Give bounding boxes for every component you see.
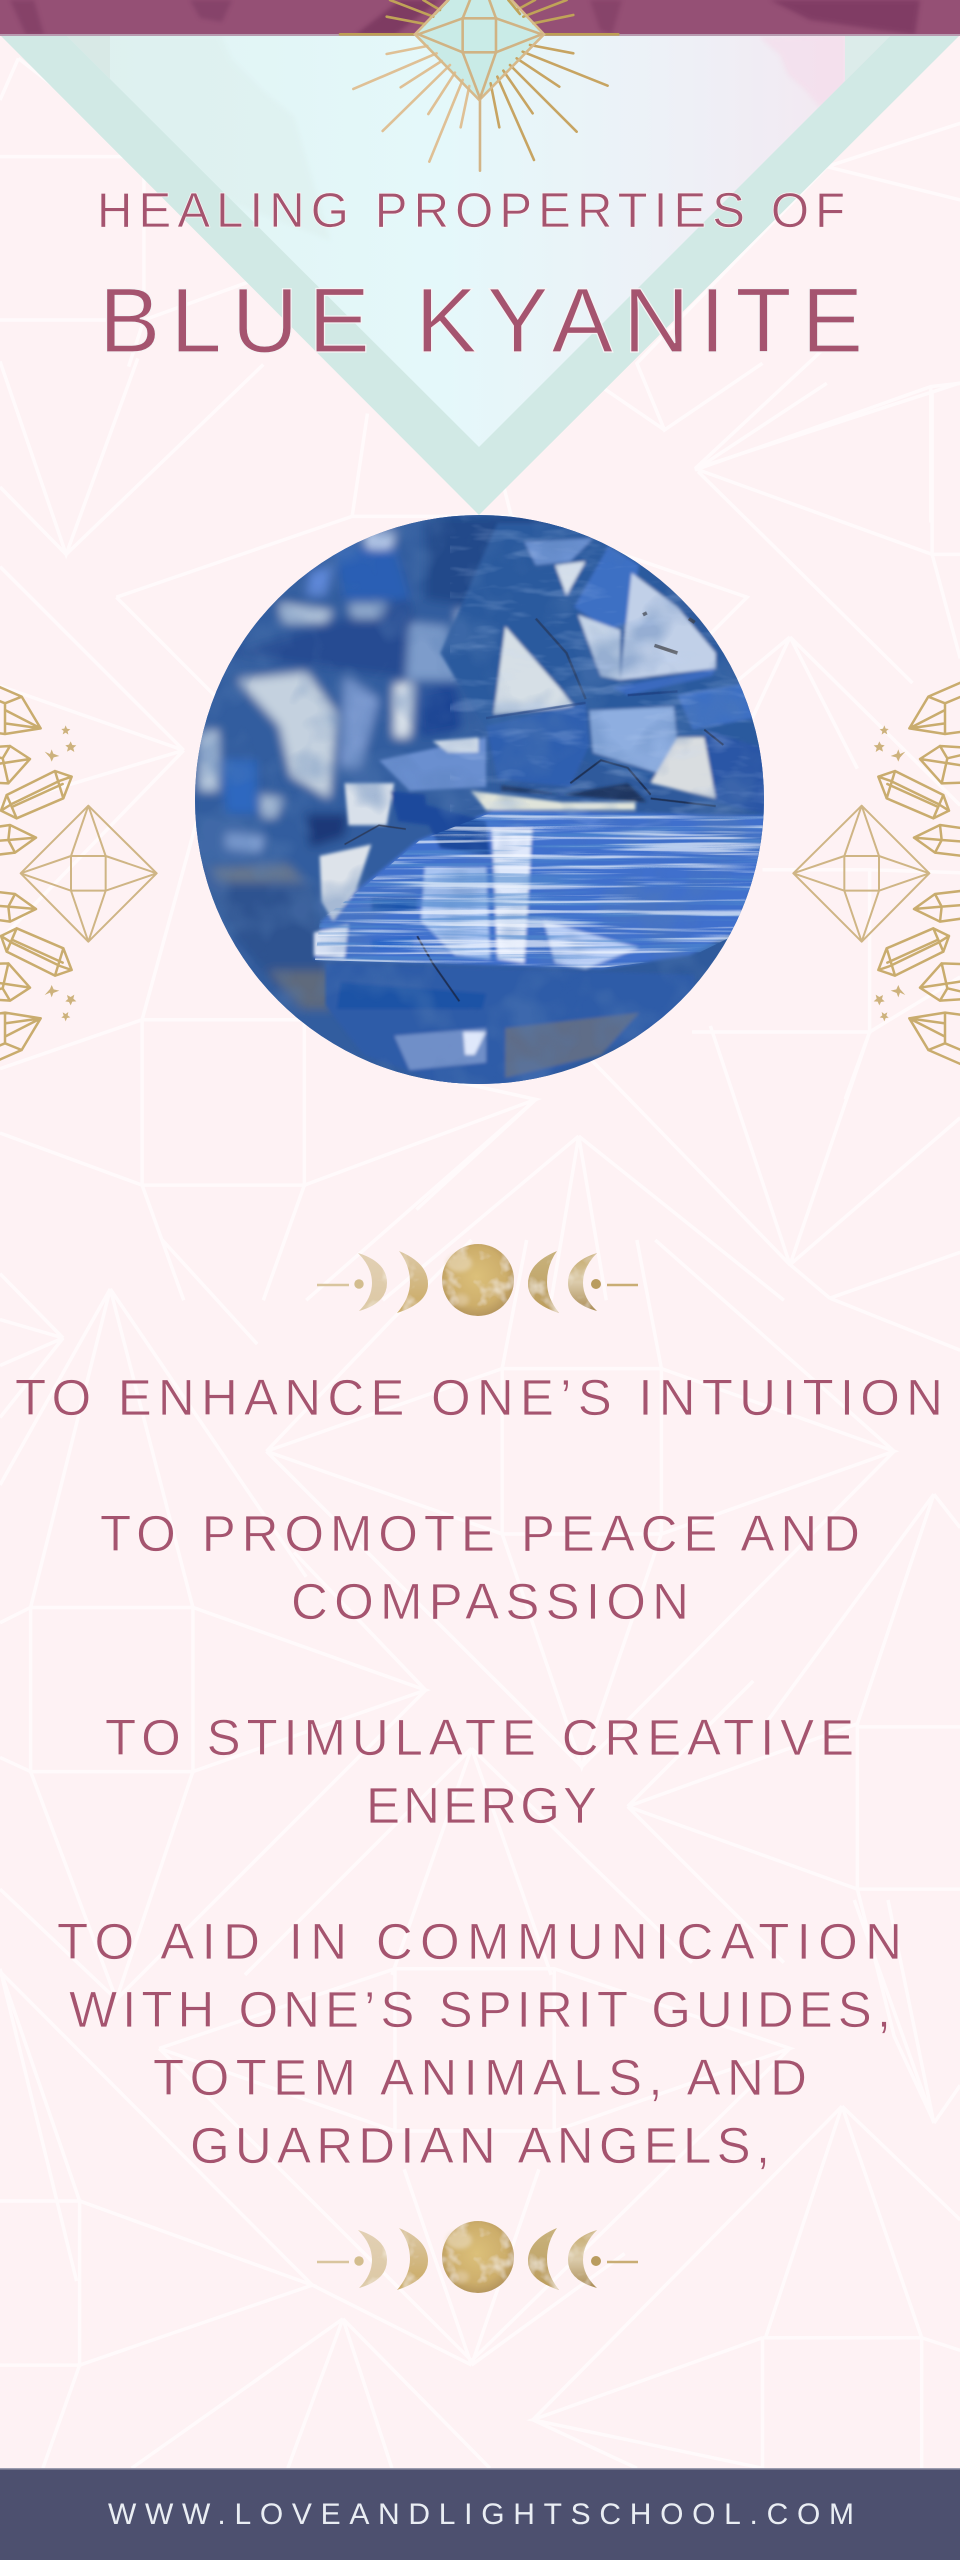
property: communication with guides: TO AID IN COMMUNICATION (57, 1913, 902, 1970)
decorative crystals: right cluster (793, 681, 960, 1066)
photo texture: crystal striations (315, 812, 765, 968)
property: peace and compassion (100, 1505, 860, 1630)
footer website address: WWW.LOVEANDLIGHTSCHOOL.COM (108, 2498, 854, 2531)
property: intuition: TO ENHANCE ONE’S INTUITION (15, 1369, 943, 1426)
photo: blue kyanite crystal in circle (190, 510, 770, 1090)
property: creative energy (105, 1709, 854, 1834)
property: communication with guides (57, 1913, 902, 2174)
property: creative energy: ENERGY (366, 1777, 597, 1834)
property: peace and compassion: COMPASSION (291, 1573, 689, 1630)
icon: moon phases bottom (317, 2221, 638, 2293)
icon: gold crystal starburst (340, 0, 618, 171)
watercolour triangle fill (66, 35, 895, 447)
decorative crystals: left cluster (0, 681, 157, 1066)
property: peace and compassion: TO PROMOTE PEACE AND (100, 1505, 860, 1562)
property: communication with guides: WITH ONE’S SPIRIT GUIDES, (69, 1981, 891, 2038)
top plum bar (0, 0, 960, 36)
property: communication with guides: GUARDIAN ANGELS, (190, 2117, 770, 2174)
footer bar (0, 2468, 960, 2560)
property: creative energy: TO STIMULATE CREATIVE (105, 1709, 854, 1766)
property: communication with guides: TOTEM ANIMALS, AND (153, 2049, 807, 2106)
photo texture: blotches (190, 510, 770, 1090)
icon: moon phases top (317, 1244, 638, 1316)
mint triangle frame (0, 35, 960, 515)
title: blue kyanite: BLUE KYANITE (99, 270, 863, 372)
list of healing properties (15, 1369, 943, 2174)
heading: healing properties of: HEALING PROPERTIES OF (97, 184, 845, 238)
